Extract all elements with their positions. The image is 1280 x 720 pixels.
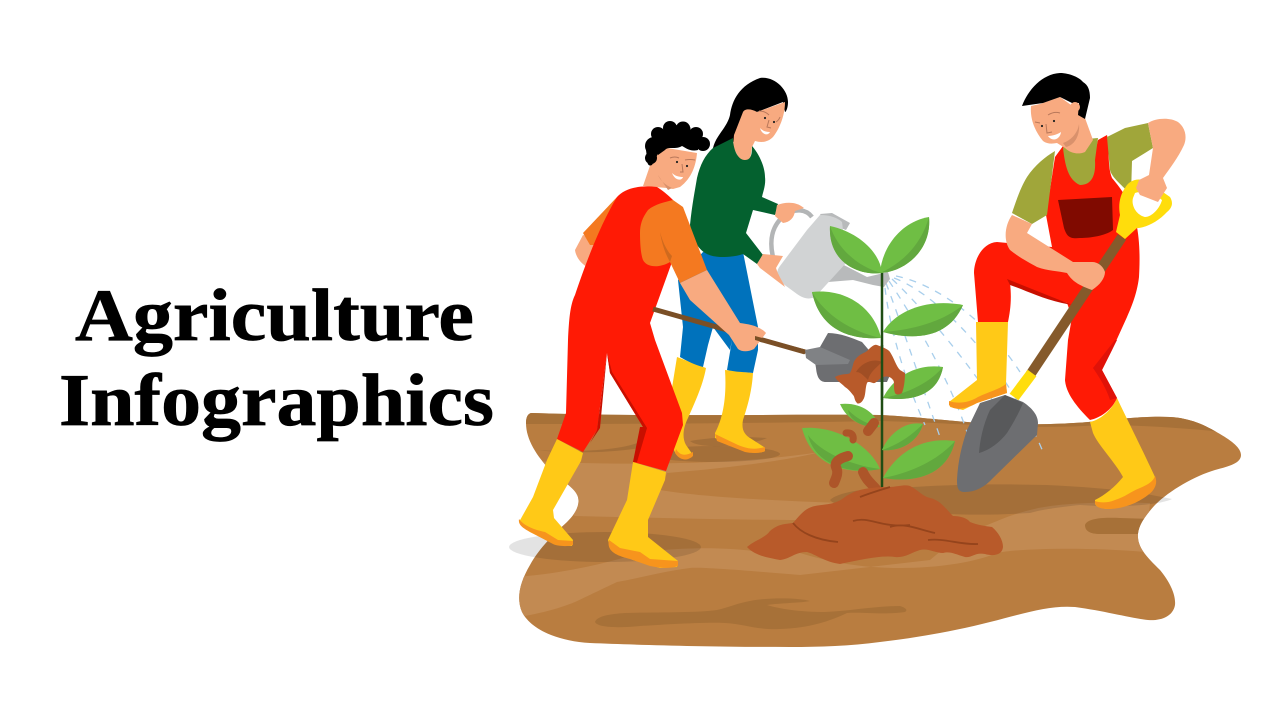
boy boots: [519, 439, 678, 568]
man face and neck: [1031, 97, 1093, 153]
woman trousers: [678, 252, 758, 373]
boy overalls: [557, 186, 683, 471]
shovel: [957, 179, 1172, 492]
falling soil: [834, 423, 876, 489]
spade head: [805, 333, 890, 382]
woman sweater: [690, 138, 778, 264]
title: Agriculture: [75, 275, 474, 357]
boy with spade: [519, 121, 890, 568]
man pocket: [1058, 197, 1113, 238]
boy spade handle: [653, 309, 805, 352]
soil mound: [747, 485, 1003, 564]
boy hair: [645, 121, 710, 166]
boy facial features: [658, 157, 695, 190]
title: Infographics: [59, 360, 494, 442]
woman facial features: [743, 110, 780, 134]
woman hands: [757, 203, 804, 287]
plant: [802, 217, 963, 493]
woman boots: [670, 357, 765, 459]
boy front arm: [680, 270, 766, 351]
woman hair: [713, 78, 788, 150]
ground: [500, 405, 1250, 647]
boy back arm: [575, 235, 600, 267]
man arms: [1006, 119, 1186, 290]
watering can: [771, 210, 890, 298]
man back boot: [949, 322, 1008, 410]
man shirt: [1012, 123, 1153, 224]
woman face: [733, 102, 785, 160]
boy back sleeve: [583, 197, 617, 245]
man front boot: [1090, 398, 1156, 509]
boy neck and face: [643, 148, 697, 189]
man hair: [1022, 73, 1090, 119]
title: [59, 275, 494, 442]
boy sleeve: [640, 200, 707, 283]
leaves: [802, 217, 963, 479]
stem: [881, 273, 883, 493]
man with shovel: [949, 73, 1186, 509]
man facial features: [1035, 102, 1080, 147]
woman with watering can: [670, 78, 890, 459]
water spray: [885, 276, 1043, 452]
ground shadows: [509, 437, 1172, 562]
man overalls: [974, 135, 1140, 420]
illustration: farmers planting a seedling: [500, 73, 1250, 647]
soil on spade: [835, 345, 905, 404]
